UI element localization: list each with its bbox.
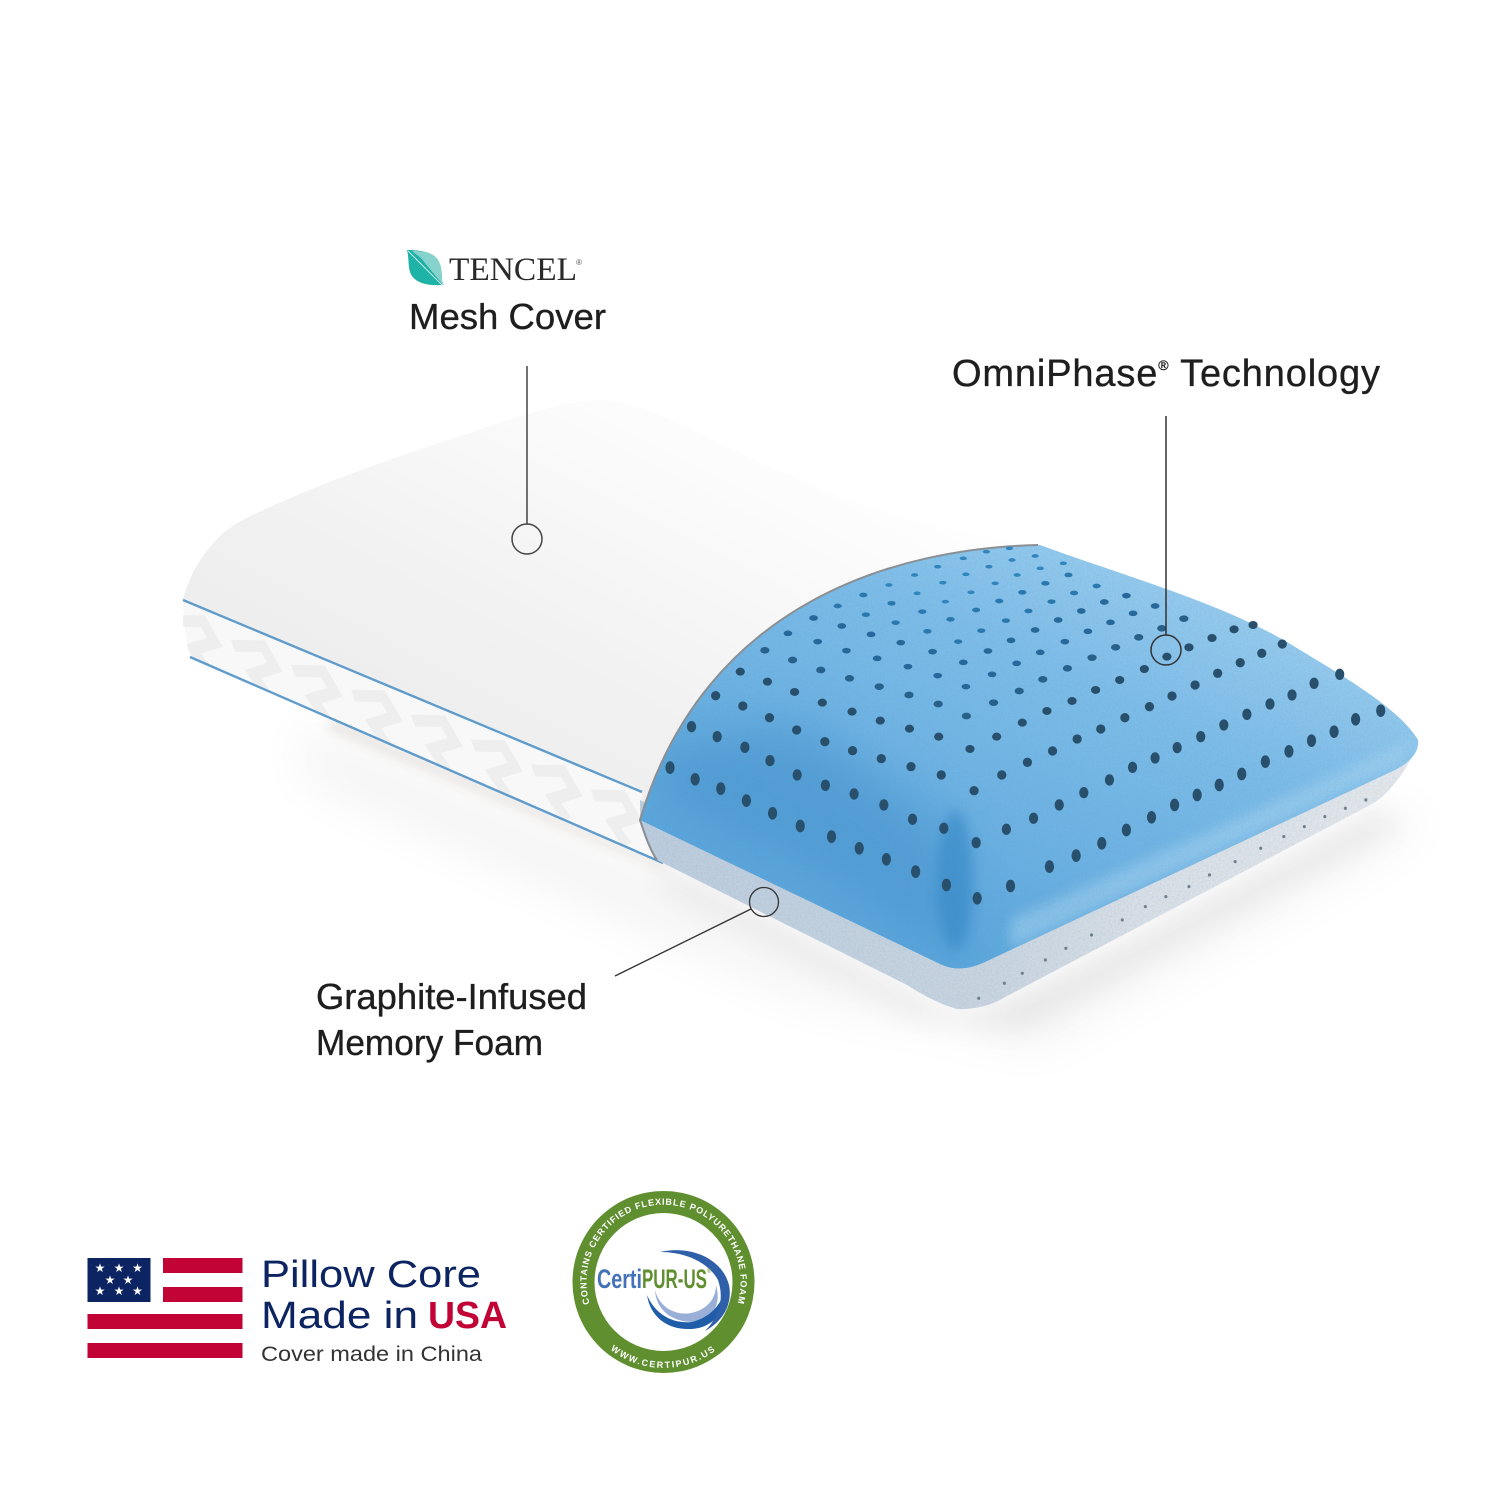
- callout: Tencel mesh cover: [407, 250, 606, 554]
- label text: Graphite-Infused: [316, 976, 587, 1017]
- icon: American flag: ★: [95, 1284, 105, 1298]
- origin statement: USA: [428, 1295, 507, 1337]
- label text: OmniPhase: [952, 353, 1157, 395]
- CertiPUR-US badge: [572, 1191, 754, 1373]
- side foam small holes: [977, 798, 1367, 1000]
- registered mark: ®: [576, 258, 582, 267]
- leader line and marker: [512, 366, 542, 554]
- registered mark: ®: [707, 1268, 712, 1275]
- graphite foam side: [640, 745, 1418, 1009]
- callout: graphite-infused memory foam: Memory Foam: [316, 1022, 543, 1063]
- icon: American flag: [88, 1258, 242, 1358]
- CertiPUR-US badge: PUR-US: [642, 1264, 707, 1294]
- CertiPUR-US badge: WWW.CERTIPUR.US: [612, 1344, 714, 1368]
- seam line: [640, 545, 1038, 860]
- icon: American flag: ★: [95, 1261, 105, 1275]
- icon: American flag: ★: [114, 1284, 124, 1298]
- swoosh logo: [647, 1250, 730, 1331]
- Tencel wordmark: TENCEL: [449, 252, 577, 288]
- front rows: [665, 704, 1385, 905]
- blue memory foam top: [630, 540, 1430, 1020]
- pillow illustration: [182, 447, 1418, 1039]
- callout: graphite-infused memory foam: [316, 888, 778, 1063]
- icon: Tencel leaf: [407, 250, 443, 286]
- origin statement: [261, 1254, 507, 1366]
- label text: ®: [1158, 357, 1169, 373]
- icon: American flag: ★: [114, 1261, 124, 1275]
- origin statement: Cover made in China: [261, 1343, 482, 1366]
- badge ring text: CONTAINS CERTIFIED FLEXIBLE POLYURETHANE FOAM: [580, 1198, 747, 1304]
- origin statement: Made in: [261, 1295, 418, 1337]
- leader line and marker: [615, 888, 778, 976]
- floor shadow: [300, 718, 1425, 1050]
- label text: Technology: [1169, 353, 1380, 395]
- blue piping: [183, 600, 642, 792]
- icon: American flag: ★: [105, 1273, 115, 1287]
- rear rows: [760, 615, 1188, 719]
- badge wordmark: Certi: [597, 1264, 642, 1294]
- perforation holes: [665, 546, 1385, 1000]
- pillow top mesh cover: [183, 400, 1040, 820]
- icon: American flag: ★: [132, 1261, 143, 1275]
- label text: Mesh Cover: [409, 296, 606, 337]
- foam texture: [630, 540, 1430, 1020]
- leader line and marker: [1151, 416, 1181, 665]
- icon: American flag: ★: [123, 1273, 133, 1287]
- origin statement: Pillow Core: [261, 1254, 481, 1296]
- callout: OmniPhase technology: [952, 353, 1380, 665]
- icon: American flag: ★: [132, 1284, 143, 1298]
- middle rows: [711, 639, 1287, 795]
- pillow side band with zigzag pattern: [173, 600, 663, 863]
